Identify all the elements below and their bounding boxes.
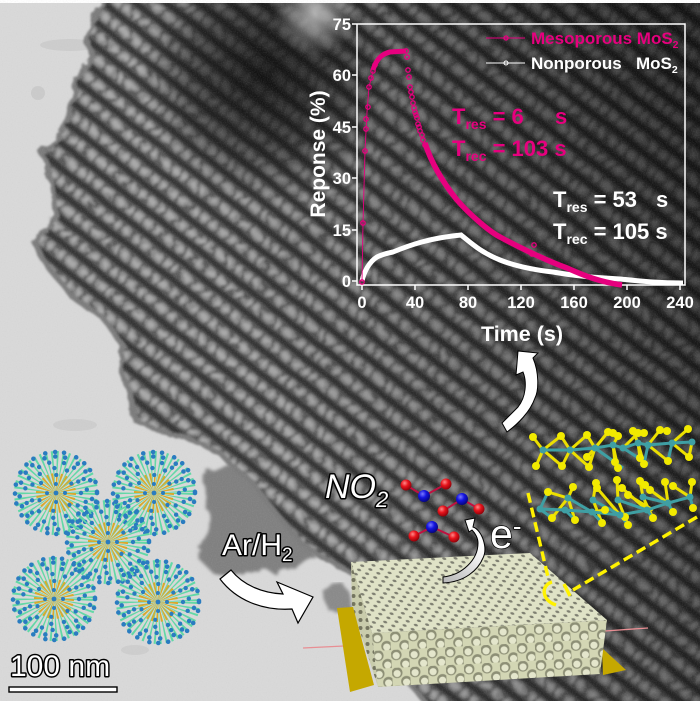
slab: top face <box>351 553 607 633</box>
micelle: top left <box>15 452 97 534</box>
micelle: top right <box>113 452 195 534</box>
annotation: nonporous times: T <box>553 219 566 244</box>
x tick labels: 160 <box>560 294 588 312</box>
annotation: mesoporous times: T <box>452 104 465 129</box>
legend: nonporous: 2 <box>672 64 678 76</box>
annotation: nonporous times: res <box>566 199 588 215</box>
arrow: carrier gas <box>220 570 313 623</box>
y tick labels: 60 <box>333 67 351 85</box>
legend: nonporous: Nonporous <box>531 54 622 73</box>
label: NO2: NO <box>325 468 376 506</box>
annotation: mesoporous times: rec <box>465 148 487 164</box>
label: carrier gas: Ar/H <box>222 529 282 562</box>
annotation: mesoporous times: T <box>452 136 465 161</box>
legend: mesoporous <box>486 29 679 51</box>
smudge: porous carbon edge <box>197 463 318 577</box>
molecule 2 <box>438 493 484 516</box>
wire: left <box>303 646 344 648</box>
annotation: nonporous times: = 53 <box>587 187 637 212</box>
annotation: nonporous times: T <box>553 187 566 212</box>
mesoporous slab <box>351 553 607 687</box>
axis frame <box>352 24 685 290</box>
arrow: slab to chart <box>502 351 538 432</box>
annotation: nonporous times: = 105 s <box>587 219 668 244</box>
x tick labels: 200 <box>613 294 641 312</box>
y tick labels: 75 <box>333 16 351 34</box>
panel: response chart <box>307 16 694 346</box>
zoom guide: dashed lines <box>528 493 697 605</box>
annotation: nonporous times: s <box>656 187 668 212</box>
crystal structure: lower MoS2 layer <box>536 476 697 529</box>
arrow: electron transfer <box>443 518 485 583</box>
curve: nonporous <box>362 235 683 283</box>
x tick labels: 120 <box>507 294 535 312</box>
annotation: mesoporous times: res <box>465 116 487 132</box>
electrode: left <box>337 607 374 692</box>
label: electron: - <box>513 511 521 541</box>
label: scale: 100 nm <box>10 650 110 683</box>
micelle: bottom right <box>117 561 199 643</box>
y tick labels: 30 <box>333 170 351 188</box>
annotation: nonporous times <box>553 187 668 247</box>
legend: nonporous: MoS <box>636 54 672 73</box>
x tick labels: 0 <box>357 294 367 312</box>
y tick labels: 0 <box>342 273 351 291</box>
annotation: mesoporous times: s <box>555 104 567 129</box>
slab: side face <box>351 562 378 687</box>
annotation: nonporous times: rec <box>566 231 588 247</box>
y tick labels: 15 <box>333 222 351 240</box>
legend: mesoporous: Mesoporous MoS <box>531 29 673 48</box>
micelle: centre <box>67 501 149 583</box>
label: carrier gas: 2 <box>282 545 293 566</box>
y tick labels: 45 <box>333 119 351 137</box>
annotation: mesoporous times: = 6 <box>486 104 524 129</box>
micelle cluster <box>13 452 199 643</box>
y tick labels <box>333 16 351 291</box>
molecule 3 <box>408 521 460 542</box>
wire: right <box>605 628 648 631</box>
x tick labels: 240 <box>666 294 694 312</box>
label: electron: e <box>490 511 513 557</box>
electrode: right <box>602 648 626 675</box>
legend: mesoporous: 2 <box>673 39 679 51</box>
x tick labels: 40 <box>406 294 424 312</box>
x tick labels: 80 <box>459 294 477 312</box>
top margin strip <box>0 0 700 3</box>
slab: front face <box>372 620 607 687</box>
annotation: mesoporous times <box>452 104 567 164</box>
micelle: bottom left <box>13 558 95 640</box>
y axis title: Reponse (%) <box>307 90 330 218</box>
legend: nonporous <box>486 54 678 76</box>
label: NO2: 2 <box>375 487 388 512</box>
x axis title: Time (s) <box>481 322 563 346</box>
annotation: mesoporous times: = 103 s <box>486 136 567 161</box>
molecules: NO2 <box>400 478 484 542</box>
curve: mesoporous <box>360 49 622 285</box>
smudge: lower edge <box>322 585 352 612</box>
crystal structure: upper MoS2 layer <box>529 425 696 472</box>
scale bar <box>9 687 117 692</box>
x tick labels <box>357 294 694 312</box>
molecule 1 <box>400 478 452 502</box>
